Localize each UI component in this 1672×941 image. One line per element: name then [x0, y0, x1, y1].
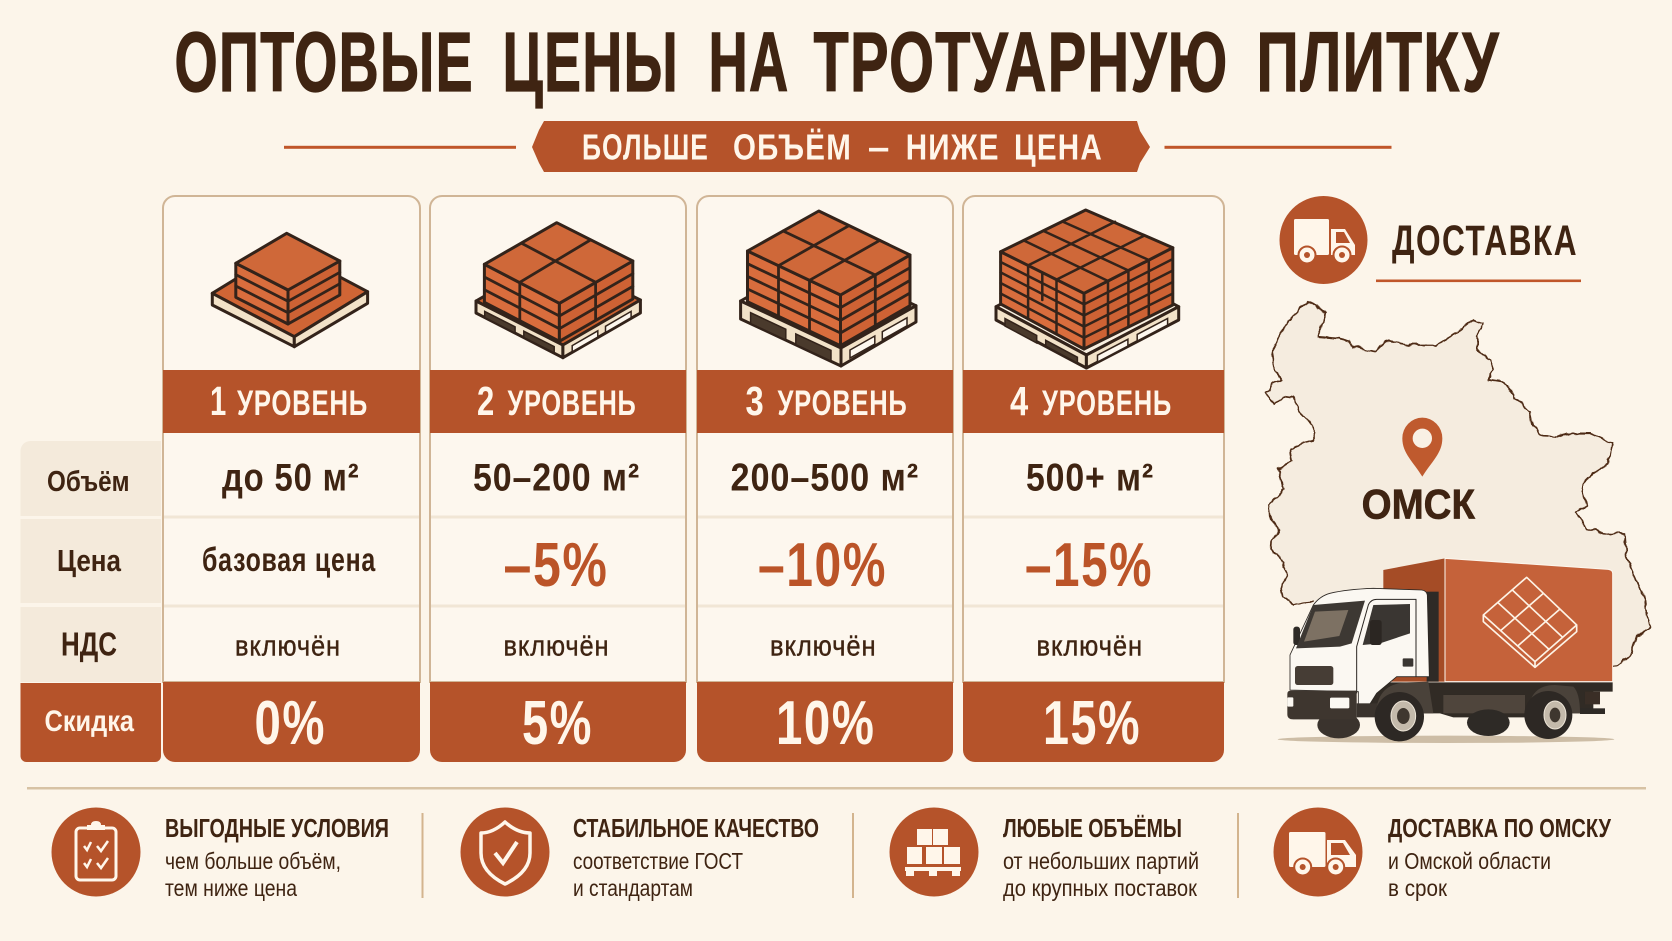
icon: tile logo on truck	[1483, 577, 1577, 667]
panel: level 4	[963, 196, 1224, 762]
discount: 0%	[254, 689, 326, 758]
panel: level 1	[163, 196, 420, 762]
subtitle banner: БОЛЬШЕ	[582, 126, 709, 167]
level 1 header	[163, 370, 420, 433]
truck illustration	[1278, 558, 1614, 743]
level 2 header	[430, 370, 686, 433]
subtitle banner	[284, 121, 1392, 172]
discount: 10%	[776, 689, 876, 758]
icon: location pin	[1402, 418, 1442, 477]
icon: clipboard	[52, 808, 140, 896]
subtitle banner: ОБЪЁМ	[733, 126, 852, 167]
icon: pallet level 2	[476, 223, 640, 358]
level 4 header	[963, 370, 1224, 433]
price: –15%	[1025, 531, 1153, 600]
volume: 500+ м²	[1026, 456, 1154, 500]
discount: 15%	[1043, 689, 1141, 758]
feature: any volumes	[890, 808, 1199, 901]
panel: level 3	[697, 196, 953, 762]
row labels column: Скидка	[44, 705, 134, 738]
volume: до 50 м²	[222, 456, 360, 500]
vat: включён	[1036, 630, 1143, 662]
vat: включён	[235, 630, 341, 662]
icon: boxes on pallet	[890, 808, 978, 896]
title: ЦЕНЫ	[502, 15, 679, 109]
description: соответствие ГОСТ	[573, 848, 743, 874]
title: НА	[708, 15, 790, 109]
title: ОПТОВЫЕ	[174, 15, 474, 109]
subtitle banner: —	[869, 126, 889, 167]
row labels column: Объём	[47, 466, 130, 498]
price: –5%	[504, 531, 608, 600]
icon: delivery truck	[1280, 196, 1368, 284]
icon: pallet level 4	[996, 210, 1179, 368]
volume: 200–500 м²	[730, 456, 919, 500]
title: ТРОТУАРНУЮ	[814, 15, 1228, 109]
discount	[163, 682, 420, 762]
heading: ДОСТАВКА ПО ОМСКУ	[1388, 813, 1612, 843]
row labels column	[20, 441, 161, 762]
feature: favorable terms	[52, 808, 389, 901]
discount	[430, 682, 686, 762]
level 4 header: 4	[1010, 378, 1029, 424]
discount	[697, 682, 953, 762]
description: тем ниже цена	[165, 875, 297, 901]
volume: 50–200 м²	[473, 456, 640, 500]
level 3 header	[697, 370, 953, 433]
level 2 header: УРОВЕНЬ	[508, 384, 636, 423]
feature: stable quality	[460, 808, 819, 901]
city label: ОМСК	[1362, 480, 1476, 527]
level 1 header: УРОВЕНЬ	[237, 384, 368, 423]
map: Omsk region	[1265, 302, 1650, 743]
row labels column: НДС	[61, 626, 117, 662]
delivery label: ДОСТАВКА	[1392, 217, 1578, 265]
description: до крупных поставок	[1003, 875, 1198, 901]
feature: delivery in Omsk	[1274, 808, 1612, 901]
heading: СТАБИЛЬНОЕ КАЧЕСТВО	[573, 813, 819, 843]
heading: ВЫГОДНЫЕ УСЛОВИЯ	[165, 813, 389, 843]
vat: включён	[770, 630, 876, 662]
price: базовая цена	[202, 541, 376, 578]
level 3 header: УРОВЕНЬ	[778, 384, 908, 423]
icon: shield	[460, 808, 550, 896]
description: и стандартам	[573, 875, 693, 901]
level 1 header: 1	[210, 378, 227, 424]
price: –10%	[758, 531, 887, 600]
description: чем больше объём,	[165, 848, 341, 874]
row labels column: Цена	[57, 543, 122, 578]
panel: level 2	[430, 196, 686, 762]
level 3 header: 3	[746, 378, 764, 424]
description: от небольших партий	[1003, 848, 1199, 874]
level 2 header: 2	[477, 378, 495, 424]
delivery heading	[1280, 196, 1581, 284]
level 4 header: УРОВЕНЬ	[1042, 384, 1172, 423]
discount	[963, 682, 1224, 762]
subtitle banner: НИЖЕ	[906, 126, 1000, 167]
subtitle banner: ЦЕНА	[1014, 126, 1103, 167]
icon: pallet level 1	[212, 233, 368, 347]
icon: pallet level 3	[741, 211, 916, 366]
heading: ЛЮБЫЕ ОБЪЁМЫ	[1003, 813, 1182, 843]
icon: truck	[1274, 808, 1362, 896]
description: и Омской области	[1388, 848, 1551, 874]
title: ПЛИТКУ	[1256, 15, 1500, 109]
vat: включён	[504, 630, 610, 662]
description: в срок	[1388, 875, 1448, 901]
discount: 5%	[522, 689, 593, 758]
